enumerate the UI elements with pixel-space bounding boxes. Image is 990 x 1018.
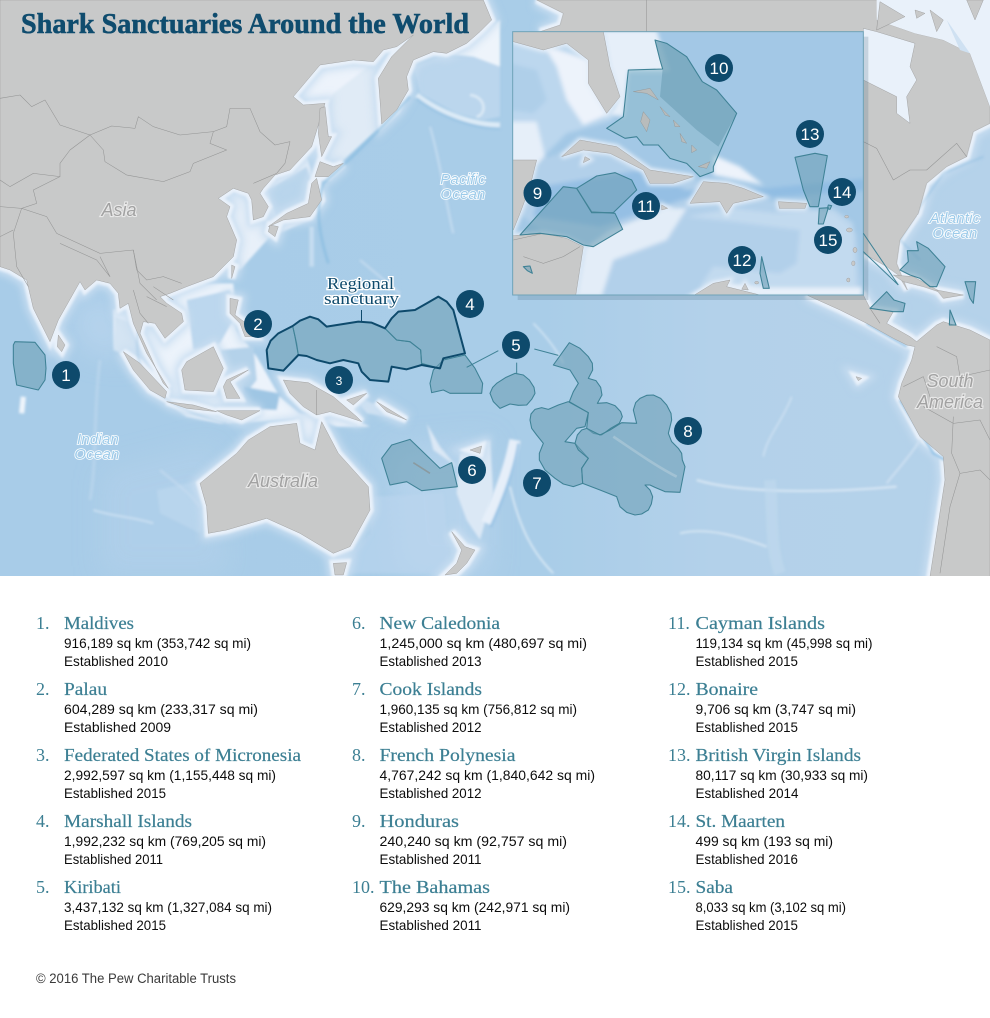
entry 15 bbox=[668, 877, 846, 933]
entry 3: Established 2015 bbox=[64, 785, 166, 801]
badge 8 bbox=[674, 417, 702, 445]
entry 7: Established 2012 bbox=[380, 719, 482, 735]
entry 11: 11. bbox=[668, 613, 690, 633]
badge 3 bbox=[325, 366, 353, 394]
entry 14 bbox=[668, 811, 833, 867]
entry 3: 2,992,597 sq km (1,155,448 sq mi) bbox=[64, 767, 276, 783]
badge 5 bbox=[502, 331, 530, 359]
label: Indian Ocean: Ocean bbox=[74, 446, 120, 463]
badge 6 bbox=[458, 456, 486, 484]
regional sanctuary: Palau, Micronesia and Marshall Islands bbox=[267, 297, 465, 382]
sanctuary 14: St. Maarten bbox=[827, 205, 832, 209]
entry 7 bbox=[352, 679, 577, 735]
entry 8 bbox=[352, 745, 595, 801]
badge 14: 14 bbox=[833, 183, 851, 202]
entry 4 bbox=[36, 811, 266, 867]
copyright footer: © 2016 The Pew Charitable Trusts bbox=[36, 971, 236, 986]
entry 5: 5. bbox=[36, 877, 50, 897]
label: Pacific Ocean: Ocean bbox=[440, 186, 486, 203]
entry 11: Established 2015 bbox=[696, 653, 798, 669]
title: Shark Sanctuaries Around the World bbox=[21, 8, 469, 40]
entry 13: 80,117 sq km (30,933 sq mi) bbox=[696, 767, 868, 783]
panel: Caribbean inset map bbox=[512, 31, 864, 296]
badge 9: 9 bbox=[533, 184, 542, 203]
badge 5: 5 bbox=[511, 336, 521, 355]
label: South America bbox=[916, 371, 983, 412]
entry 2: Established 2009 bbox=[64, 719, 171, 735]
entry 12: Established 2015 bbox=[696, 719, 798, 735]
entry 4: Established 2011 bbox=[64, 851, 163, 867]
entry 2: Palau bbox=[64, 679, 107, 699]
lesser antilles bbox=[755, 215, 857, 284]
badge 4: 4 bbox=[465, 295, 475, 314]
entry 10: 10. bbox=[352, 877, 374, 897]
land bbox=[0, 0, 990, 577]
entry 7: 1,960,135 sq km (756,812 sq mi) bbox=[380, 701, 577, 717]
entry 1: Established 2010 bbox=[64, 653, 168, 669]
list: column 1 bbox=[36, 613, 301, 933]
entry 6: 1,245,000 sq km (480,697 sq mi) bbox=[380, 635, 587, 651]
mini sanctuaries in the Caribbean bbox=[870, 242, 976, 325]
badge 13 bbox=[796, 120, 824, 148]
entry 9: 240,240 sq km (92,757 sq mi) bbox=[380, 833, 567, 849]
sanctuary 1: Maldives bbox=[13, 342, 46, 390]
sanctuary 6: New Caledonia bbox=[382, 439, 457, 491]
kiribati leader lines bbox=[467, 349, 558, 373]
panel: Pacific sanctuaries bbox=[13, 297, 685, 515]
map number badges bbox=[52, 54, 856, 497]
entry 8: Established 2012 bbox=[380, 785, 482, 801]
entry 12: 9,706 sq km (3,747 sq mi) bbox=[696, 701, 856, 717]
entry 9: Established 2011 bbox=[380, 851, 482, 867]
entry 3 bbox=[36, 745, 301, 801]
entry 12: 12. bbox=[668, 679, 690, 699]
entry 11: 119,134 sq km (45,998 sq mi) bbox=[696, 635, 872, 651]
entry 2: 604,289 sq km (233,317 sq mi) bbox=[64, 701, 258, 717]
badge 10: 10 bbox=[710, 59, 728, 78]
badge 8: 8 bbox=[683, 422, 693, 441]
entry 4: 1,992,232 sq km (769,205 sq mi) bbox=[64, 833, 266, 849]
sanctuary 12: Bonaire bbox=[760, 257, 769, 288]
label: Pacific Ocean bbox=[440, 171, 486, 203]
label: Regional sanctuary: sanctuary bbox=[324, 289, 400, 308]
badge 4 bbox=[456, 290, 484, 318]
badge 15: 15 bbox=[819, 231, 837, 250]
sanctuary in Belize area bbox=[523, 266, 532, 273]
entry 15: 15. bbox=[668, 877, 690, 897]
entry 15: Established 2015 bbox=[696, 917, 798, 933]
label: Regional sanctuary bbox=[324, 274, 400, 322]
sanctuary 11: Cayman Islands bbox=[577, 173, 637, 213]
entry 13: Established 2014 bbox=[696, 785, 799, 801]
badge 13: 13 bbox=[801, 125, 819, 144]
map bbox=[0, 0, 990, 577]
coastal shelf glow bbox=[0, 0, 990, 577]
label: Asia: Asia bbox=[100, 200, 137, 220]
entry 14: St. Maarten bbox=[696, 811, 785, 831]
arrow: inset leader to Caribbean bbox=[863, 233, 898, 285]
entry 8: 4,767,242 sq km (1,840,642 sq mi) bbox=[380, 767, 595, 783]
entry 15: Saba bbox=[696, 877, 733, 897]
label: Australia: Australia bbox=[247, 471, 318, 491]
badge 3: 3 bbox=[336, 374, 343, 388]
badge 12: 12 bbox=[733, 251, 751, 270]
entry 14: 14. bbox=[668, 811, 690, 831]
country borders bbox=[0, 0, 990, 573]
sanctuary 15: Saba bbox=[818, 208, 828, 224]
entry 13: 13. bbox=[668, 745, 690, 765]
entry 3: Federated States of Micronesia bbox=[64, 745, 301, 765]
entry 5: Established 2015 bbox=[64, 917, 166, 933]
sanctuary 5: Kiribati bbox=[430, 343, 622, 435]
sanctuary 8: French Polynesia bbox=[575, 395, 685, 515]
badge 2 bbox=[244, 310, 272, 338]
sanctuary 10: The Bahamas bbox=[607, 40, 737, 177]
badge 7: 7 bbox=[532, 474, 542, 493]
entry 9: 9. bbox=[352, 811, 366, 831]
entry 4: 4. bbox=[36, 811, 50, 831]
entry 13 bbox=[668, 745, 868, 801]
entry 5: Kiribati bbox=[64, 877, 121, 897]
entry 1: 1. bbox=[36, 613, 50, 633]
entry 11: Cayman Islands bbox=[696, 613, 825, 633]
badge 15 bbox=[814, 226, 842, 254]
list: column 3 bbox=[668, 613, 872, 933]
badge 14 bbox=[828, 178, 856, 206]
entry 6: 6. bbox=[352, 613, 366, 633]
entry 13: British Virgin Islands bbox=[696, 745, 861, 765]
inset shadow bbox=[518, 37, 868, 300]
hudson bay and northern waters bbox=[863, 0, 990, 123]
entry 6: Established 2013 bbox=[380, 653, 482, 669]
badge 9 bbox=[524, 179, 552, 207]
entry 1: Maldives bbox=[64, 613, 134, 633]
badge 11 bbox=[632, 192, 660, 220]
entry 9 bbox=[352, 811, 567, 867]
badge 1 bbox=[52, 361, 80, 389]
shallow seas bbox=[113, 20, 500, 573]
entry 7: Cook Islands bbox=[380, 679, 482, 699]
entry 6: New Caledonia bbox=[380, 613, 500, 633]
entry 12: Bonaire bbox=[696, 679, 758, 699]
badge 11: 11 bbox=[637, 197, 655, 216]
badge 1: 1 bbox=[61, 366, 71, 385]
badge 12 bbox=[728, 246, 756, 274]
sanctuary 7: Cook Islands bbox=[530, 402, 588, 487]
trenches and ridges bbox=[22, 95, 983, 573]
label: Atlantic Ocean: Atlantic bbox=[929, 210, 981, 227]
label: Regional sanctuary: Regional bbox=[327, 274, 394, 293]
label: South America: South bbox=[926, 371, 974, 391]
entry 3: 3. bbox=[36, 745, 50, 765]
label: Pacific Ocean: Pacific bbox=[440, 171, 486, 188]
entry 1: 916,189 sq km (353,742 sq mi) bbox=[64, 635, 251, 651]
entry 5: 3,437,132 sq km (1,327,084 sq mi) bbox=[64, 899, 272, 915]
entry 7: 7. bbox=[352, 679, 366, 699]
entry 15: 8,033 sq km (3,102 sq mi) bbox=[696, 899, 846, 915]
label: Indian Ocean: Indian bbox=[77, 431, 119, 448]
entry 8: 8. bbox=[352, 745, 366, 765]
badge 7 bbox=[523, 469, 551, 497]
entry 14: Established 2016 bbox=[696, 851, 798, 867]
entry 11 bbox=[668, 613, 872, 669]
badge 6: 6 bbox=[467, 461, 477, 480]
entry 2: 2. bbox=[36, 679, 50, 699]
entry 8: French Polynesia bbox=[380, 745, 516, 765]
entry 10: The Bahamas bbox=[380, 877, 490, 897]
badge 10 bbox=[705, 54, 733, 82]
entry 10: 629,293 sq km (242,971 sq mi) bbox=[380, 899, 570, 915]
label: South America: America bbox=[916, 392, 983, 412]
label: Atlantic Ocean: Ocean bbox=[932, 225, 978, 242]
sanctuary 9: Honduras bbox=[520, 187, 623, 247]
entry 5 bbox=[36, 877, 272, 933]
label: Atlantic Ocean bbox=[929, 210, 981, 242]
entry 4: Marshall Islands bbox=[64, 811, 192, 831]
entry 6 bbox=[352, 613, 587, 669]
sanctuary 13: British Virgin Islands bbox=[795, 153, 827, 207]
entry 10 bbox=[352, 877, 570, 933]
entry 2 bbox=[36, 679, 258, 735]
label: Indian Ocean bbox=[74, 431, 120, 463]
entry 10: Established 2011 bbox=[380, 917, 482, 933]
entry 14: 499 sq km (193 sq mi) bbox=[696, 833, 833, 849]
entry 9: Honduras bbox=[380, 811, 459, 831]
entry 12 bbox=[668, 679, 856, 735]
badge 2: 2 bbox=[253, 315, 263, 334]
list: column 2 bbox=[352, 613, 595, 933]
entry 1 bbox=[36, 613, 251, 669]
